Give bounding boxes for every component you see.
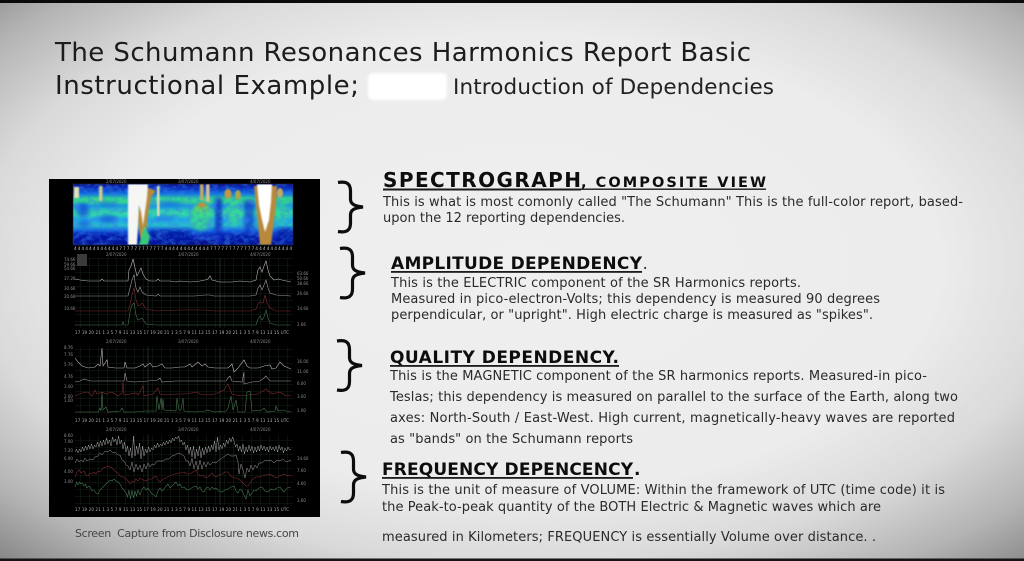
frequency chart: 3/07/2020 <box>178 427 199 432</box>
amplitude chart: 59.66 <box>64 262 76 267</box>
section: quality dependency: as "bands" on the Schumann reports <box>390 432 633 447</box>
spectrograph chart: 2/07/2020 <box>106 179 127 184</box>
quality chart <box>64 339 309 423</box>
section: quality dependency: QUALITY DEPENDENCY. <box>390 348 619 368</box>
brace: spectrograph <box>338 182 363 232</box>
section: frequency dependency: the Peak-to-peak quantity of the BOTH Electric & Magnetic waves which are <box>382 500 881 515</box>
section: quality dependency: axes: North-South / East-West. High current, magnetically-heavy waves are reported <box>390 411 955 426</box>
section: quality dependency: This is the MAGNETIC component of the SR harmonics reports. Measured-in pico- <box>389 369 927 384</box>
amplitude chart <box>64 252 309 335</box>
section: frequency dependency: measured in Kilometers; FREQUENCY is essentially Volume over distance. . <box>382 530 876 545</box>
frequency chart: 4.00 <box>64 469 73 474</box>
section: spectrograph: upon the 12 reporting dependencies. <box>383 211 625 226</box>
spectrograph chart <box>73 179 293 251</box>
frequency chart: 8.60 <box>64 433 73 438</box>
section: amplitude dependency <box>390 254 880 323</box>
title: The Schumann Resonances Harmonics Report Basic <box>54 38 751 68</box>
quality chart: 1.00 <box>297 408 306 413</box>
frequency chart <box>64 427 309 512</box>
title: Introduction of Dependencies <box>453 75 774 100</box>
frequency chart: 4.60 <box>297 481 306 486</box>
frequency chart: 6.90 <box>64 456 73 461</box>
frequency chart: 1.60 <box>297 498 306 503</box>
section: spectrograph: SPECTROGRAPH <box>383 168 581 192</box>
title: Instructional Example; <box>55 71 359 101</box>
quality chart: 11.00 <box>297 369 309 374</box>
quality chart: 6.00 <box>297 381 306 386</box>
frequency chart: 7.90 <box>64 439 73 444</box>
brace: quality <box>337 341 362 390</box>
section: amplitude dependency: Measured in pico-electron-Volts; this dependency is measured 90 degrees <box>391 292 880 307</box>
quality chart: 3.00 <box>64 384 73 389</box>
quality chart: 5.76 <box>64 362 73 367</box>
section: quality dependency <box>389 348 958 447</box>
quality chart: 4.76 <box>64 374 73 379</box>
quality chart: 2.00 <box>64 394 73 399</box>
screen capture of Schumann report charts <box>49 179 320 517</box>
quality chart: 3/07/2020 <box>178 339 199 344</box>
frequency chart: 3.00 <box>64 479 73 484</box>
amplitude chart: 4/07/2020 <box>250 252 271 257</box>
brace: amplitude <box>340 248 365 298</box>
caption: Screen Capture from Disclosure news.com <box>75 527 299 540</box>
amplitude chart: 10.66 <box>64 306 76 311</box>
quality chart: 7.76 <box>64 352 73 357</box>
quality chart: 17 19 20 21 1 3 5 7 9 11 13 15 17 19 20 21 1 3 5 7 9 11 13 15 17 19 20 21 1 3 5 7 9 11 13 15 UTC <box>75 418 289 423</box>
amplitude chart: 2/07/2020 <box>106 252 127 257</box>
quality chart: 4/07/2020 <box>250 339 271 344</box>
frequency chart: 2/07/2020 <box>106 427 127 432</box>
section: spectrograph: , COMPOSITE VIEW <box>581 175 766 191</box>
section: amplitude dependency: AMPLITUDE DEPENDENCY <box>391 254 643 274</box>
amplitude chart: 37.26 <box>64 276 76 281</box>
amplitude chart: 14.66 <box>297 306 309 311</box>
section: spectrograph: This is what is most comonly called "The Schumann" This is the full-color report, based- <box>382 195 963 210</box>
amplitude chart: 50.66 <box>297 276 309 281</box>
spectrograph chart: 4/07/2020 <box>250 179 271 184</box>
quality chart: 1.00 <box>64 398 73 403</box>
amplitude chart: 2.66 <box>297 322 306 327</box>
frequency chart: 4/07/2020 <box>250 427 271 432</box>
amplitude chart: 74.66 <box>64 257 76 262</box>
amplitude chart: 54.66 <box>64 266 76 271</box>
frequency chart: 7.60 <box>297 468 306 473</box>
brace: frequency <box>341 452 366 502</box>
quality chart: 3.00 <box>297 394 306 399</box>
amplitude chart: 63.66 <box>297 271 309 276</box>
spectrograph chart: 4 4 4 4 4 4 4 4 4 4 4 4 7 7 7 7 7 7 7 7 7 7 7 7 4 4 4 4 4 4 4 4 4 4 4 4 7 7 7 7 7 7 7 7 7 7 7 7 4 4 4 4 4 4 4 4 4 4 <box>74 246 292 251</box>
section: frequency dependency: FREQUENCY DEPENCENCY <box>382 460 634 480</box>
amplitude chart: 30.66 <box>64 286 76 291</box>
title <box>54 38 774 101</box>
frequency chart: 17 19 20 21 1 3 5 7 9 11 13 15 17 19 20 21 1 3 5 7 9 11 13 15 17 19 20 21 1 3 5 7 9 11 13 15 UTC <box>75 507 289 512</box>
section: frequency dependency: . <box>634 460 640 480</box>
section: amplitude dependency: perpendicular, or "upright". High electric charge is measured as "spikes". <box>391 308 873 323</box>
spectrograph chart: 3/07/2020 <box>178 179 199 184</box>
section: quality dependency: Teslas; this dependency is measured on parallel to the surface of the Earth, along two <box>389 390 958 405</box>
section: amplitude dependency: . <box>642 254 648 274</box>
amplitude chart: 26.66 <box>297 291 309 296</box>
quality chart: 16.00 <box>297 359 309 364</box>
frequency chart: 7.20 <box>64 448 73 453</box>
section: frequency dependency <box>381 460 945 545</box>
amplitude chart: 3/07/2020 <box>178 252 199 257</box>
amplitude chart: 17 19 20 21 1 3 5 7 9 11 13 15 17 19 20 21 1 3 5 7 9 11 13 15 17 19 20 21 1 3 5 7 9 11 13 15 UTC <box>75 330 289 335</box>
amplitude chart: 20.66 <box>64 294 76 299</box>
section: amplitude dependency: This is the ELECTRIC component of the SR Harmonics reports. <box>390 276 801 291</box>
section: spectrograph <box>382 168 963 226</box>
amplitude chart: 38.66 <box>297 281 309 286</box>
quality chart: 2/07/2020 <box>106 339 127 344</box>
section: frequency dependency: This is the unit of measure of VOLUME: Within the framework of UTC (time code) it is <box>381 483 945 498</box>
quality chart: 8.76 <box>64 345 73 350</box>
frequency chart: 14.60 <box>297 456 309 461</box>
